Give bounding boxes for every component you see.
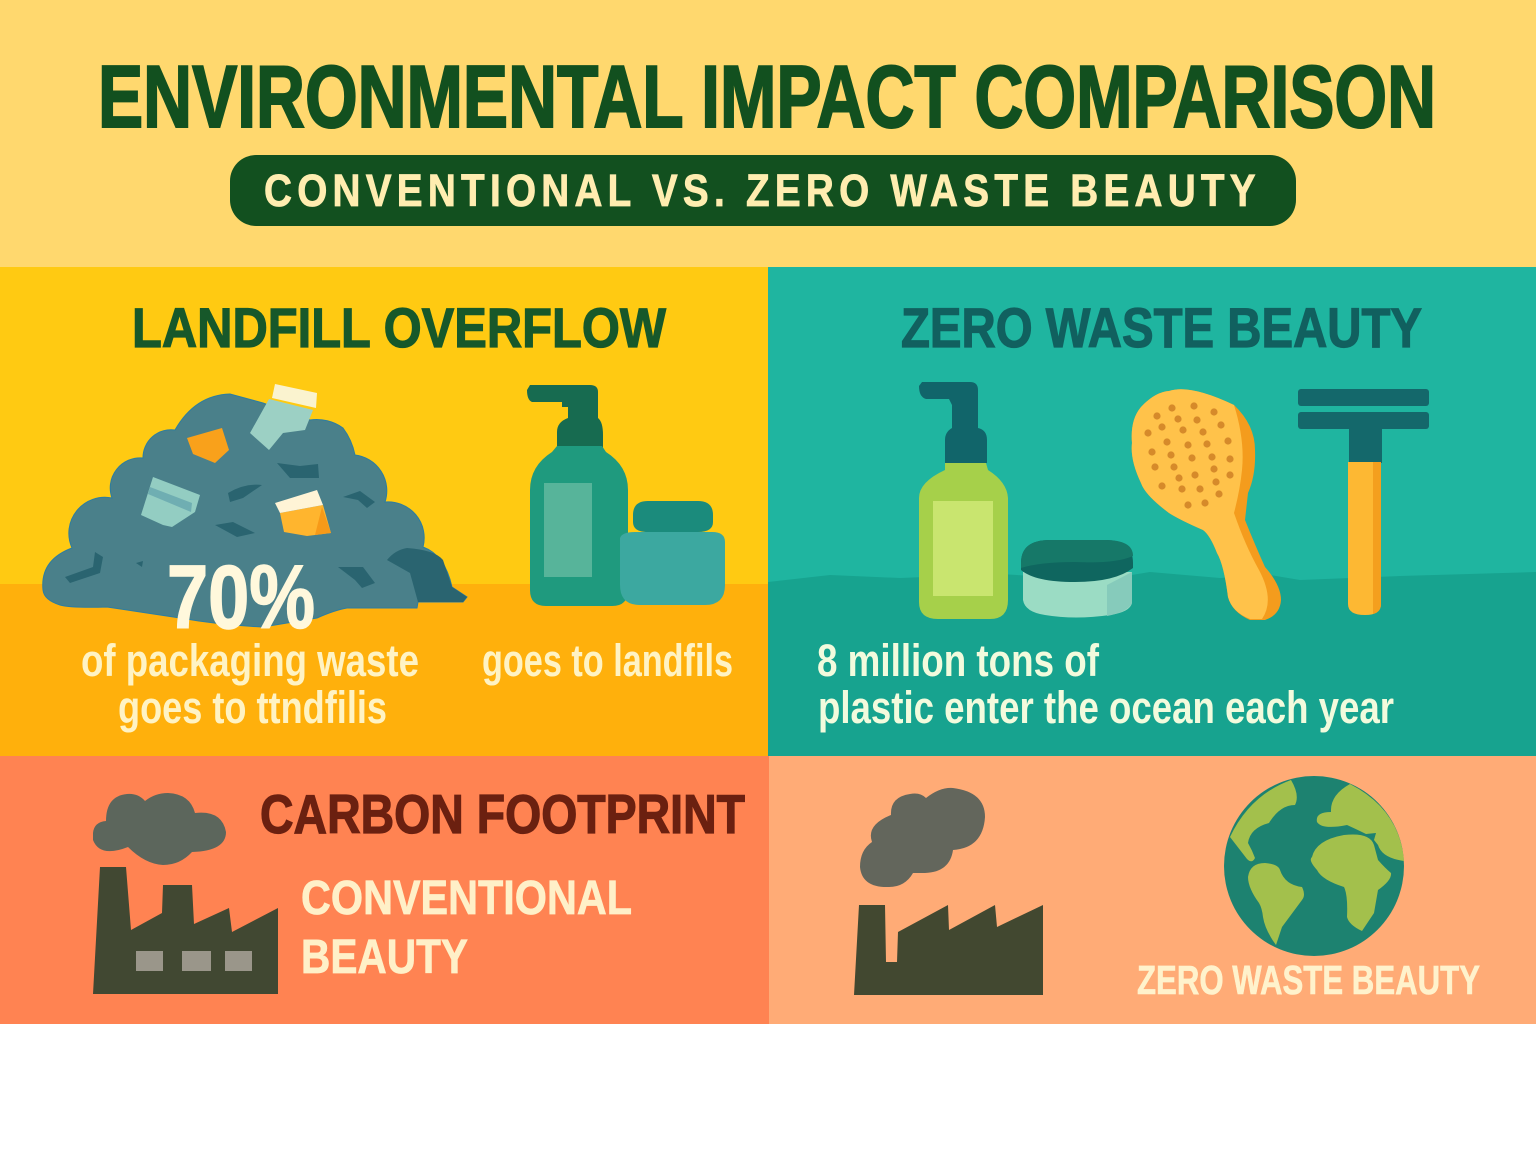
icon: globe [1224, 776, 1404, 956]
waste: cup [280, 505, 331, 536]
panel: carbon footprint conventional [0, 756, 769, 1024]
heading: carbon footprint: CARBON FOOTPRINT [260, 783, 745, 845]
icon: landfill pile [43, 384, 467, 627]
heading: landfill overflow: LANDFILL OVERFLOW [132, 296, 666, 359]
text: conventional beauty: BEAUTY [301, 931, 468, 984]
subtitle pill [230, 155, 1296, 226]
icon: safety razor [1298, 389, 1429, 615]
panel: zero waste beauty [768, 267, 1536, 756]
subtitle pill: CONVENTIONAL VS. ZERO WASTE BEAUTY [264, 165, 1256, 216]
text: conventional beauty [301, 872, 632, 984]
header panel [0, 0, 1536, 267]
icon: brush [1132, 389, 1281, 620]
text: packaging waste: goes to ttndfilis [118, 682, 387, 733]
text: packaging waste [81, 635, 419, 733]
text: goes to landfills: goes to landfils [482, 635, 733, 686]
waste: box [141, 477, 200, 527]
text: ocean plastic [817, 635, 1394, 733]
icon: smoke cloud [93, 793, 226, 865]
icon: pump bottle and jar [527, 385, 725, 606]
text: conventional beauty: CONVENTIONAL [301, 872, 632, 925]
icon: factory with windows [93, 867, 278, 994]
waste: carton [187, 428, 229, 463]
icon: factory [854, 905, 1043, 995]
panel: landfill overflow [0, 267, 768, 756]
text: ocean plastic: 8 million tons of [817, 635, 1100, 686]
panel: carbon footprint zero waste [769, 756, 1536, 1024]
heading: zero waste beauty: ZERO WASTE BEAUTY [901, 296, 1422, 359]
icon: green pump bottle [919, 382, 1008, 619]
waste: bottle [250, 399, 313, 450]
text: packaging waste: of packaging waste [81, 635, 419, 686]
text: ocean plastic: plastic enter the ocean each year [818, 682, 1394, 733]
icon: jar [1021, 540, 1133, 618]
icon: smoke cloud [860, 788, 985, 887]
stat: 70%: 70% [167, 548, 315, 648]
